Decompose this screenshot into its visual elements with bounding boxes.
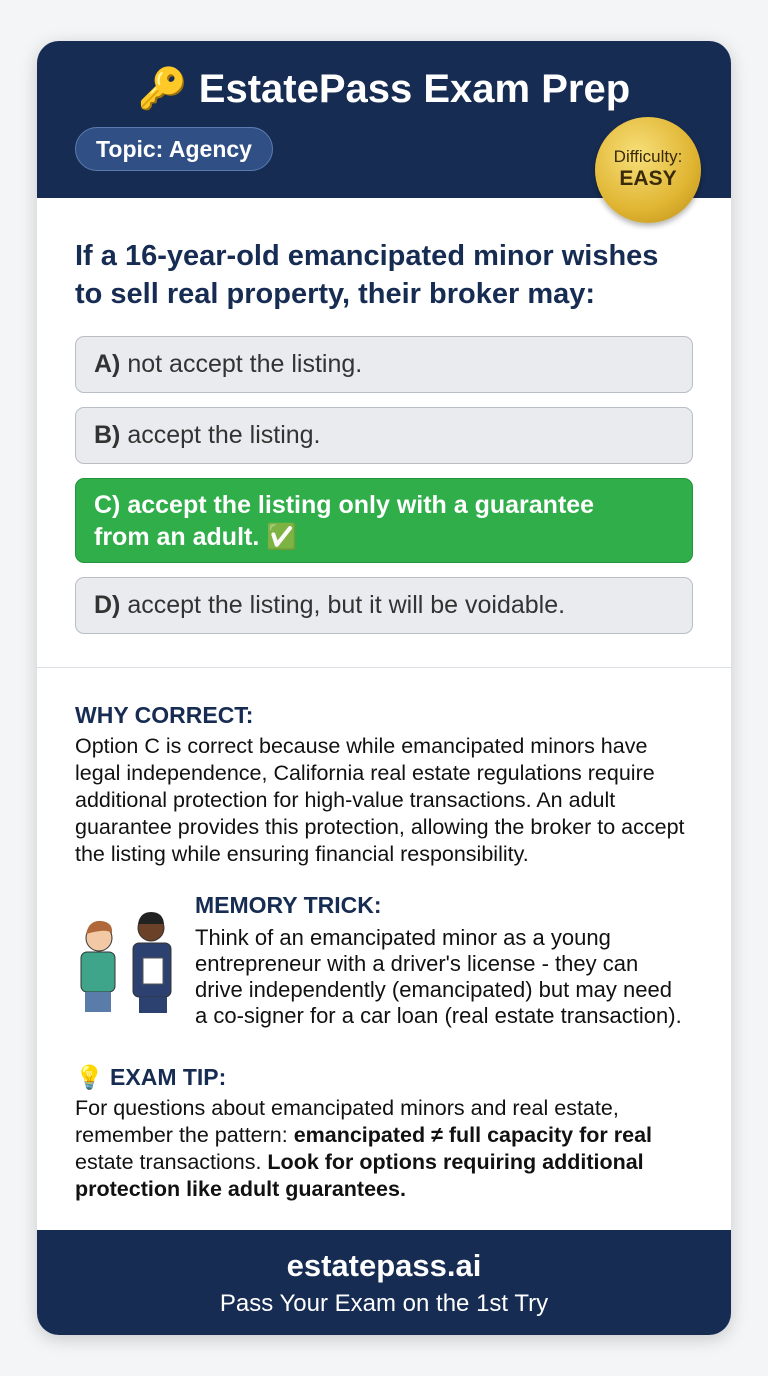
option C correct <box>75 478 693 563</box>
header <box>37 41 731 198</box>
difficulty badge: Difficulty: <box>614 147 682 166</box>
option A <box>75 336 693 393</box>
topic pill: Topic: Agency <box>96 136 252 162</box>
difficulty badge <box>595 117 701 223</box>
why correct text: Option C is correct because while emancipated minors have legal independence, California real estate regulations require additional protection for high-value transactions. An adult guarantee provides this protection, allowing the broker to accept the listing while ensuring financial responsibility. <box>75 734 685 866</box>
exam tip heading: 💡 EXAM TIP: <box>75 1064 226 1090</box>
question: If a 16-year-old emancipated minor wishes to sell real property, their broker may: <box>75 240 658 310</box>
option B: B) accept the listing. <box>94 421 321 449</box>
option D <box>75 577 693 634</box>
option A: A) not accept the listing. <box>94 350 362 378</box>
option D: D) accept the listing, but it will be voidable. <box>94 591 565 619</box>
memory trick text: Think of an emancipated minor as a young entrepreneur with a driver's license - they can drive independently (emancipated) but may need a co-signer for a car loan (real estate transaction). <box>195 925 682 1028</box>
footer <box>37 1230 731 1335</box>
exam tip text: For questions about emancipated minors and real estate, remember the pattern: emancipated ≠ full capacity for real estate transactions. Look for options requiring additional protection like adult guarantees. <box>75 1096 652 1201</box>
illustration: minor and broker <box>80 912 172 1013</box>
footer tagline: Pass Your Exam on the 1st Try <box>220 1290 548 1317</box>
memory trick heading: MEMORY TRICK: <box>195 892 382 918</box>
why correct heading: WHY CORRECT: <box>75 702 253 728</box>
difficulty badge: EASY <box>619 167 677 190</box>
option C correct: C) accept the listing only with a guarantee from an adult. ✅ <box>94 491 594 551</box>
option B <box>75 407 693 464</box>
title: 🔑 EstatePass Exam Prep <box>138 67 630 111</box>
topic pill <box>75 127 273 171</box>
footer brand: estatepass.ai <box>287 1248 481 1283</box>
